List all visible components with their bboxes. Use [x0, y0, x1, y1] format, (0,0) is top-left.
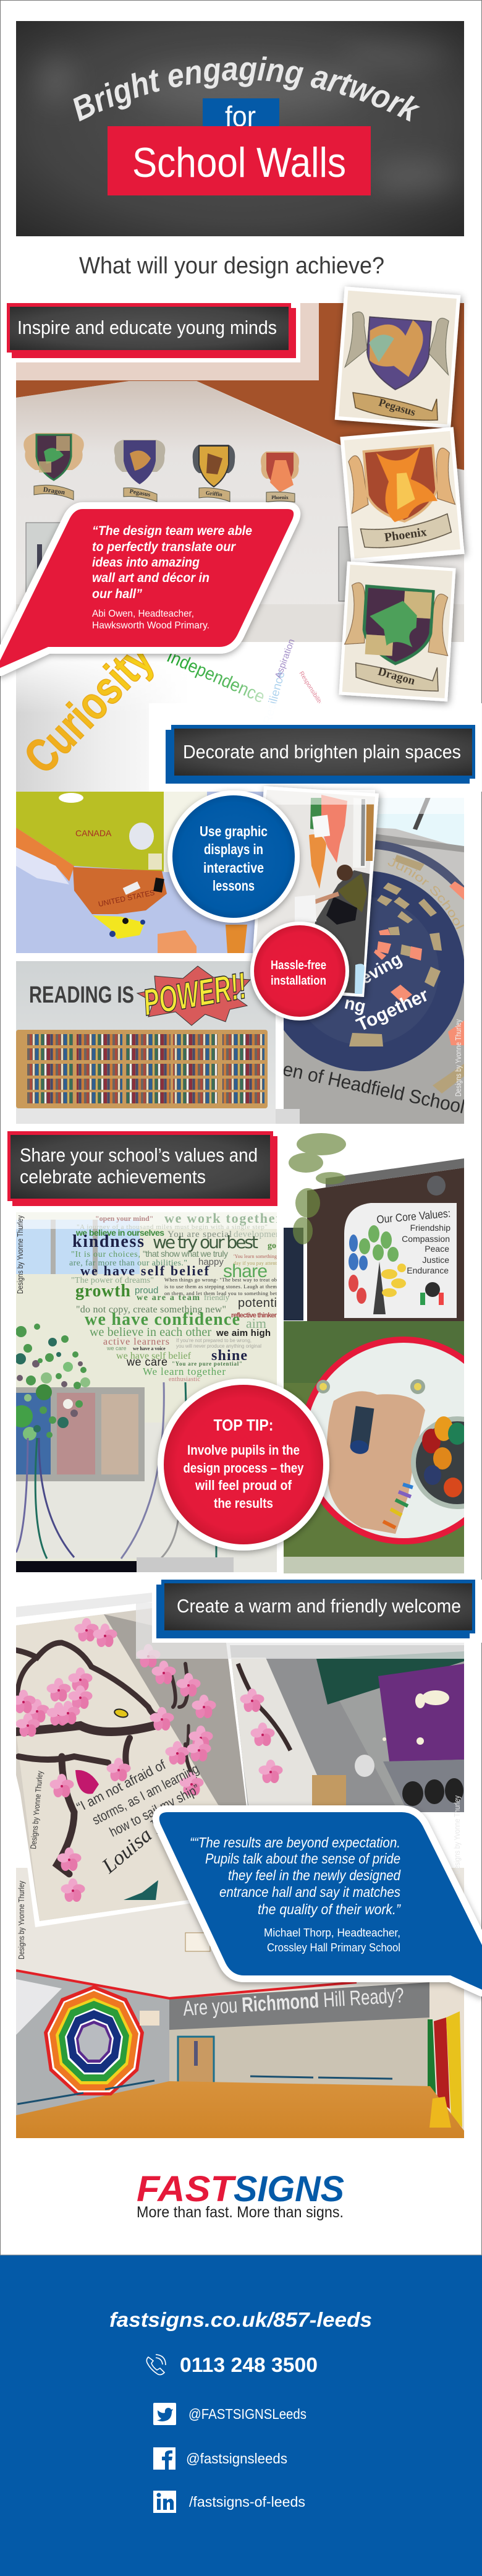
- quote text: [190, 1834, 401, 1917]
- sign tree: [349, 1225, 406, 1314]
- title: curved chalk heading: Bright engaging artwork: [73, 56, 420, 122]
- title: red School Walls box: [108, 126, 371, 195]
- text: Headfield School wall lettering: en of Headfield School: [281, 1058, 467, 1118]
- words cloud: active learners: [103, 1337, 169, 1347]
- words cloud: go: [268, 1241, 276, 1251]
- crayon jar: [411, 1416, 482, 1509]
- quote on wall: [74, 1744, 209, 1848]
- words cloud: "It is our choices,: [71, 1250, 140, 1259]
- photo: circular wall display: [284, 798, 464, 1124]
- quote text: entrance hall and say it matches: [219, 1884, 400, 1900]
- credit: Designs by Yvonne Thurley: [454, 1019, 463, 1097]
- icon: linkedin: [153, 2491, 176, 2513]
- twitter handle: @FASTSIGNSLeeds: [188, 2406, 307, 2422]
- quote attribution: Abi Owen, Headteacher,: [92, 609, 194, 619]
- wall word: Aspiration: Aspiration: [273, 638, 297, 680]
- core values sign: Endurance: [407, 1265, 449, 1275]
- quote text: Pupils talk about the sense of pride: [205, 1851, 400, 1867]
- banner: Decorate and brighten plain spaces: Decorate and brighten plain spaces: [183, 741, 461, 763]
- title: red School Walls box: School Walls: [132, 139, 346, 186]
- words cloud: we care: [106, 1345, 127, 1351]
- doors: [26, 523, 353, 609]
- photo: Reading is Power library wall: [16, 961, 276, 1124]
- website: fastsigns.co.uk/857-leeds: [109, 2308, 372, 2331]
- words cloud: we try our best: [153, 1232, 258, 1252]
- words cloud: we have confidence: [85, 1310, 240, 1329]
- panel: title chalkboard: [16, 21, 464, 236]
- words cloud: friendly: [204, 1293, 230, 1302]
- words cloud: we care: [126, 1356, 167, 1368]
- wall art: comic burst: [137, 966, 250, 1025]
- translucent strip: [136, 1603, 464, 1659]
- wall word: Respect: Responsibility: [297, 670, 323, 706]
- clerestory window: [185, 1933, 210, 1951]
- banner: Phoenix: [360, 513, 452, 550]
- mini shield: griffin: [193, 445, 235, 502]
- callout: blue circle: displays in: [204, 841, 263, 857]
- hall doors: [178, 2037, 214, 2084]
- callout: blue circle: lessons: [213, 878, 255, 894]
- logo: FASTSIGNS: FAST: [137, 2169, 237, 2209]
- words cloud: we believe in ourselves: [75, 1228, 164, 1238]
- facebook handle: @fastsignsleeds: [186, 2450, 287, 2467]
- card: Pegasus photo: [335, 286, 460, 429]
- words cloud: aim: [246, 1316, 266, 1331]
- banner: Inspire and educate young minds: Inspire and educate young minds: [17, 317, 277, 338]
- words cloud: [69, 1210, 284, 1383]
- map label: Canada: CANADA: [75, 828, 112, 838]
- floor: [16, 2081, 464, 2138]
- icon: facebook: [153, 2447, 175, 2470]
- photo: classroom world map: [16, 792, 276, 953]
- mini shield: pegasus: [114, 440, 165, 502]
- photo: cherry blossom wall right: [230, 1645, 464, 1874]
- callout: red circle: Hassle-free: [271, 959, 326, 972]
- text: Learning wall lettering: ng: [343, 993, 368, 1016]
- phone number: 0113 248 3500: [180, 2353, 318, 2376]
- linkedin handle: /fastsigns-of-leeds: [189, 2494, 305, 2510]
- words cloud: we believe in each other: [90, 1325, 211, 1339]
- words cloud: We learn together: [143, 1366, 226, 1377]
- text: Together wall lettering: Together: [353, 985, 432, 1035]
- words cloud: When things go wrong- "The best way to treat ob: [164, 1277, 277, 1283]
- photo: rainbow hall: [16, 1868, 464, 2138]
- callout: blue circle: Use graphic: [200, 823, 268, 839]
- callout: blue circle: [167, 790, 300, 923]
- words cloud: you will never produce anything original: [176, 1343, 261, 1349]
- logo: FASTSIGNS: SIGNS: [234, 2169, 344, 2209]
- banner: Dragon: Dragon: [376, 665, 416, 688]
- crayon: [349, 1406, 374, 1455]
- words cloud: You are special: [167, 1230, 232, 1239]
- mini shield: phoenix: [261, 451, 299, 502]
- salmon tiles: [374, 881, 464, 1045]
- callout: red circle: [250, 922, 349, 1021]
- tree foliage: [289, 1133, 346, 1244]
- words cloud: development: [234, 1230, 284, 1239]
- quote text: wall art and décor in: [92, 571, 209, 585]
- quote text: [92, 524, 252, 601]
- words cloud: "You are pure potential": [172, 1361, 242, 1367]
- hand: [327, 1391, 425, 1534]
- quote text: our hall”: [92, 587, 142, 601]
- words cloud: day if you pay attent: [234, 1260, 277, 1266]
- core values sign: [344, 1203, 457, 1318]
- quote on wall: “I am not afraid of: [74, 1757, 169, 1815]
- words cloud: "open your mind": [95, 1214, 153, 1223]
- quote attribution: [264, 1927, 400, 1954]
- words cloud: share: [223, 1261, 268, 1282]
- words cloud: we have a voice: [133, 1346, 166, 1351]
- butterfly teal: [124, 1880, 158, 1900]
- panel: footer contact: [0, 2255, 482, 2576]
- dot tree: [11, 1324, 90, 1440]
- quote attribution: Michael Thorp, Headteacher,: [264, 1927, 400, 1939]
- tan tiles: [349, 855, 464, 1093]
- photo: installer fitting world map: [250, 786, 379, 997]
- words cloud: we have self belief: [116, 1351, 192, 1361]
- title: blue for box: [203, 98, 279, 134]
- wall text: Are you Richmond Hill Ready?: Are you Richmond Hill Ready?: [182, 1983, 405, 2021]
- photo: cherry blossom wall right: Designs by Yvonne Thurley: [452, 1795, 462, 1874]
- words cloud: reflective thinker: [231, 1312, 277, 1319]
- colour doors: [428, 2011, 462, 2128]
- quote text: to perfectly translate our: [92, 540, 237, 554]
- air conditioning unit: [140, 2011, 159, 2026]
- banner: Pegasus: Pegasus: [378, 396, 417, 418]
- subtitle: What will your design achieve?: [79, 253, 384, 279]
- words cloud: enthusiastic: [169, 1376, 201, 1383]
- mini shield: phoenix: Phoenix: [271, 495, 289, 500]
- banner: Pegasus: [351, 393, 439, 422]
- callout: top tip circle: [158, 1379, 329, 1551]
- wall world map: [309, 795, 347, 889]
- words cloud: "that show what we truly: [143, 1249, 228, 1259]
- callout: red circle: installation: [271, 974, 326, 988]
- tip text: design process – they: [183, 1460, 304, 1476]
- words cloud: "The power of dreams": [71, 1276, 154, 1285]
- tree trunks: [16, 1382, 216, 1559]
- skylights: [376, 798, 464, 852]
- credit: Designs by Yvonne Thurley: [15, 1215, 25, 1294]
- words cloud: If you're not prepared to be wrong,: [176, 1338, 252, 1343]
- banner: Dragon: [354, 662, 439, 691]
- mini shield: dragon: [23, 433, 84, 500]
- top window: [16, 1220, 140, 1274]
- tip text: the results: [214, 1496, 273, 1511]
- banner: Phoenix: Phoenix: [384, 525, 428, 544]
- photo inset: child colouring with crayons: [305, 1337, 464, 1544]
- core values sign: Peace: [425, 1244, 449, 1254]
- words cloud: proud: [135, 1285, 158, 1296]
- quote text: the quality of their work.”: [258, 1901, 401, 1917]
- map label: United States: UNITED STATES: [98, 888, 155, 909]
- benches: [17, 2076, 392, 2104]
- photo: school building with core values sign: [284, 1131, 464, 1573]
- wet floor sign: [429, 2097, 451, 2128]
- wall word: Independence: Independence: [164, 646, 268, 708]
- lower window: [16, 1387, 145, 1481]
- icon: phone: [146, 2355, 166, 2375]
- banner: Create a warm and friendly welcome: [152, 1580, 482, 1643]
- wall word: Resilience: Resilience: [261, 670, 288, 725]
- quote attribution: Crossley Hall Primary School: [267, 1941, 400, 1954]
- signature: Louisa M: [98, 1808, 175, 1878]
- core values sign: Justice: [422, 1255, 449, 1265]
- words cloud: "do not copy, create something new": [76, 1304, 226, 1315]
- panel: hall photo with shields: [16, 303, 464, 642]
- quote attribution: Hawksworth Wood Primary.: [92, 620, 209, 631]
- colour stripes: [383, 1484, 413, 1528]
- title: blue for box: for: [225, 100, 256, 132]
- bookshelves: [16, 1030, 268, 1108]
- words cloud: potenti: [238, 1296, 277, 1310]
- quote text: “The design team were able: [92, 524, 252, 538]
- mini shield: griffin: Griffin: [205, 490, 222, 497]
- words cloud: are, far more than our abilities.": [69, 1259, 187, 1268]
- words cloud: on them, and let them lead you to something bet: [164, 1290, 277, 1296]
- rainbow octagon: [44, 1985, 144, 2095]
- card: Phoenix photo: [340, 427, 465, 564]
- text: Junior School wall lettering: Junior School: [388, 858, 464, 930]
- icon: twitter: [153, 2403, 176, 2425]
- logo: FASTSIGNS: More than fast. More than signs.: [137, 2204, 344, 2221]
- wall art: POWER!!: POWER!!: [140, 965, 250, 1024]
- words cloud: happy: [198, 1257, 224, 1267]
- callout: red quote bubble: [0, 509, 294, 669]
- wall word: Curiosity: Curiosity: [14, 632, 163, 784]
- quote text: ““The results are beyond expectation.: [190, 1834, 400, 1851]
- mini shield: pegasus: Pegasus: [129, 488, 151, 499]
- carpet: [309, 870, 370, 994]
- banner: Inspire and educate young minds: [7, 303, 300, 362]
- banner: Share your school's values: Share your school’s values and: [20, 1144, 258, 1166]
- banner: Decorate and brighten plain spaces: [166, 725, 475, 784]
- words cloud: we are a team: [137, 1293, 200, 1303]
- map pins: [109, 854, 164, 937]
- banner: Share your school's values: celebrate achievements: [20, 1166, 206, 1187]
- tip text: will feel proud of: [195, 1478, 292, 1493]
- quote text: they feel in the newly designed: [228, 1867, 401, 1883]
- quote on wall: how to sail my ship”: [107, 1781, 202, 1840]
- wall text: Reading is: READING IS: [29, 982, 134, 1008]
- tip text: Involve pupils in the: [187, 1442, 300, 1458]
- door: [353, 798, 374, 868]
- words cloud: kindness: [72, 1232, 144, 1251]
- installer: [308, 865, 367, 925]
- branches: [16, 1643, 198, 1874]
- callout: blue quote bubble: [159, 1812, 482, 1990]
- words cloud: is to use them as stepping stones. Laugh at them: [164, 1283, 277, 1290]
- card: Dragon photo: [339, 562, 456, 701]
- bee: [114, 1708, 129, 1719]
- words cloud: we aim high: [216, 1328, 271, 1338]
- mini shield: dragon: Dragon: [43, 486, 66, 496]
- lawn and hedge: [284, 1321, 464, 1383]
- tip text: [183, 1442, 304, 1511]
- quote on wall: storms, as I am learning: [90, 1761, 201, 1828]
- credit: Designs by Yvonne Thurley: [28, 1770, 44, 1849]
- words cloud: "A journey of a thousand miles must begin with a single step": [77, 1223, 268, 1231]
- panel: curiosity wall: [14, 632, 482, 792]
- credit: Designs by Yvonne Thurley: [17, 1881, 26, 1959]
- callout: blue circle: interactive: [203, 860, 264, 876]
- core values sign: Compassion: [402, 1234, 450, 1244]
- photo: values words wall: [11, 1210, 284, 1572]
- core values sign: Our Core Values:: [376, 1207, 451, 1226]
- quote text: ideas into amazing: [92, 555, 200, 570]
- quote attribution: [92, 609, 209, 631]
- banner: Create a warm and friendly welcome: Create a warm and friendly welcome: [177, 1595, 461, 1617]
- words cloud: growth: [75, 1282, 130, 1301]
- photo: cherry blossom wall left: [11, 1593, 251, 1930]
- butterfly pink: [75, 1770, 99, 1794]
- floor strip: [16, 1557, 234, 1572]
- words cloud: we have self belief: [80, 1263, 209, 1278]
- veil strip under circle: [276, 1109, 300, 1124]
- logo: FASTSIGNS: [137, 2169, 344, 2221]
- text: Achieving wall lettering: eving: [357, 949, 405, 988]
- words cloud: 'You learn something: [234, 1254, 277, 1259]
- blossoms: [11, 1618, 216, 1902]
- banner: Share your school's values: [7, 1131, 277, 1206]
- tip heading: TOP TIP:: [214, 1416, 273, 1434]
- words cloud: shine: [211, 1348, 247, 1364]
- words cloud: we work together: [164, 1210, 282, 1226]
- core values sign: Friendship: [410, 1223, 450, 1233]
